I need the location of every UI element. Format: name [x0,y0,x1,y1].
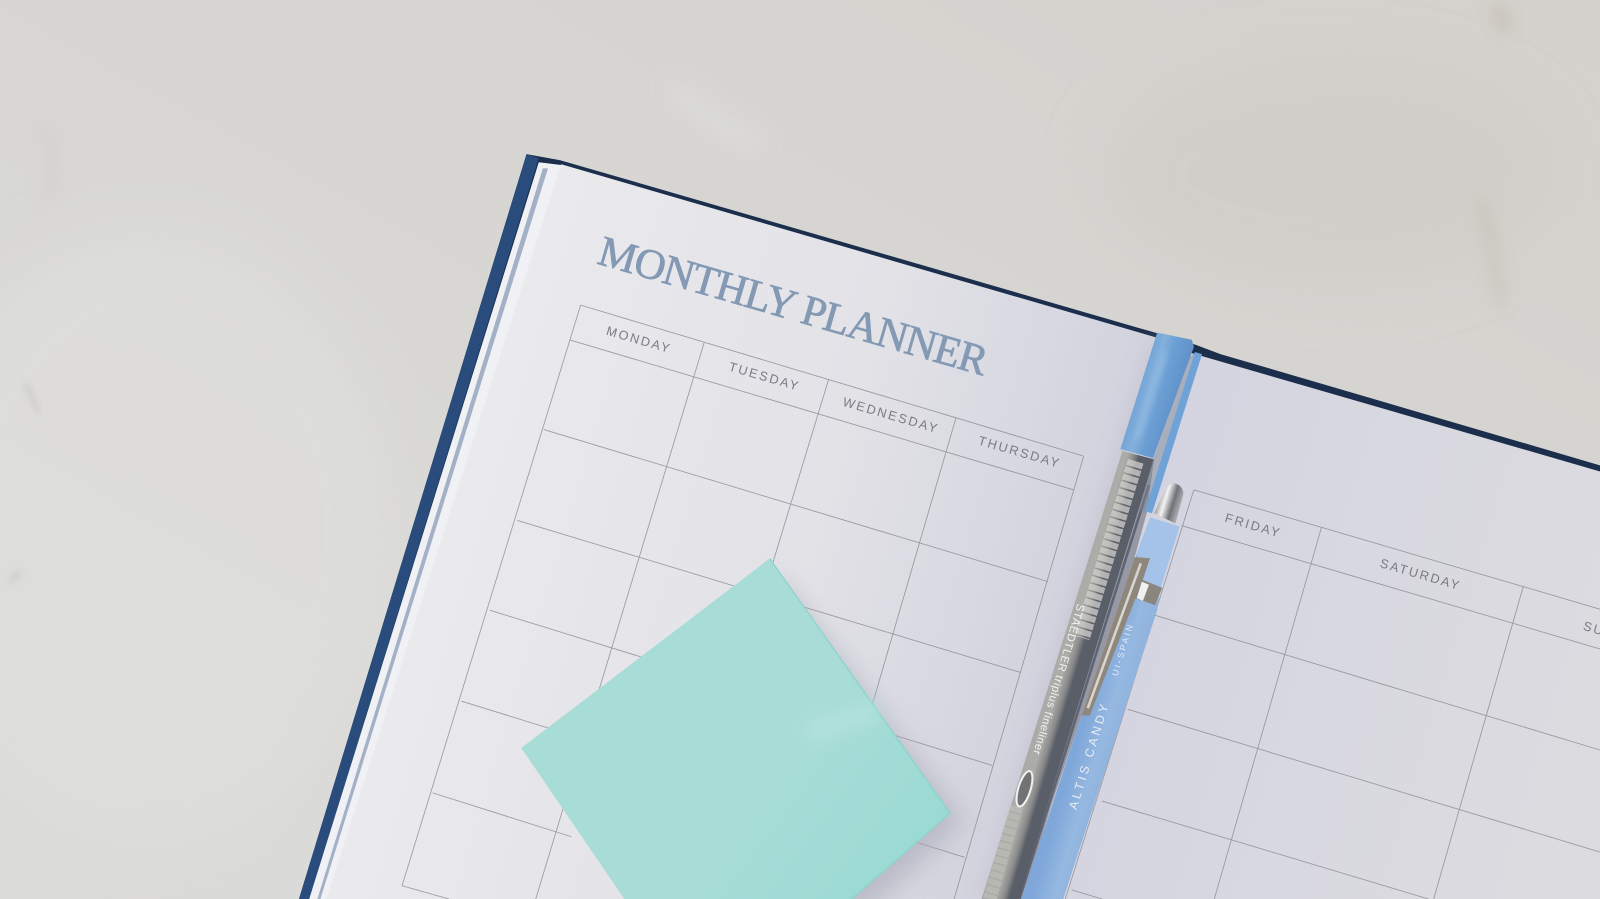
label: tuesday: TUESDAY [727,359,802,394]
page block edge [309,162,563,899]
fineliner body [982,451,1154,899]
label: wednesday: WEDNESDAY [841,394,941,436]
title: monthly planner: MONTHLY PLANNER [593,228,994,385]
cover left strip [299,154,539,899]
sticky note edge [521,558,951,899]
pen gap shadow [1017,459,1154,899]
pencil barrel [1021,553,1160,899]
right page calendar grid [1065,490,1600,899]
right page [1020,342,1600,899]
silver fineliner pen [982,451,1154,899]
sticky note [521,558,964,899]
cap clip shadow [1139,352,1195,512]
pencil collar [1137,517,1180,597]
pencil metal clip [1082,557,1162,715]
pencil lead size text: UI-SPAIN [1110,623,1135,677]
book cover [299,154,1600,899]
cap clip [1145,352,1202,513]
pencil chrome top [1154,483,1183,523]
left page calendar grid [402,305,1084,899]
fineliner ribs bottom [990,806,1016,899]
weekday labels [605,323,1600,639]
label: friday: FRIDAY [1223,510,1283,541]
label: monday: MONDAY [605,323,673,356]
label: saturday: SATURDAY [1378,555,1463,593]
mechanical pencil [1021,483,1183,899]
label: thursday: THURSDAY [976,433,1063,471]
fineliner logo oval [1013,769,1036,808]
left page [327,164,1157,899]
fineliner brand text: STAEDTLER triplus fineliner [1030,602,1086,756]
fineliner ribs top [1082,461,1136,638]
sticky note face [521,559,949,899]
spine shadow [980,342,1165,899]
pencil brand text: ALTIS CANDY [1066,703,1111,811]
fineliner dark edge [1019,485,1149,899]
blue fineliner cap [1120,333,1202,513]
sticky note shadow [714,571,964,899]
planner book [299,154,1600,899]
pens [982,333,1202,899]
